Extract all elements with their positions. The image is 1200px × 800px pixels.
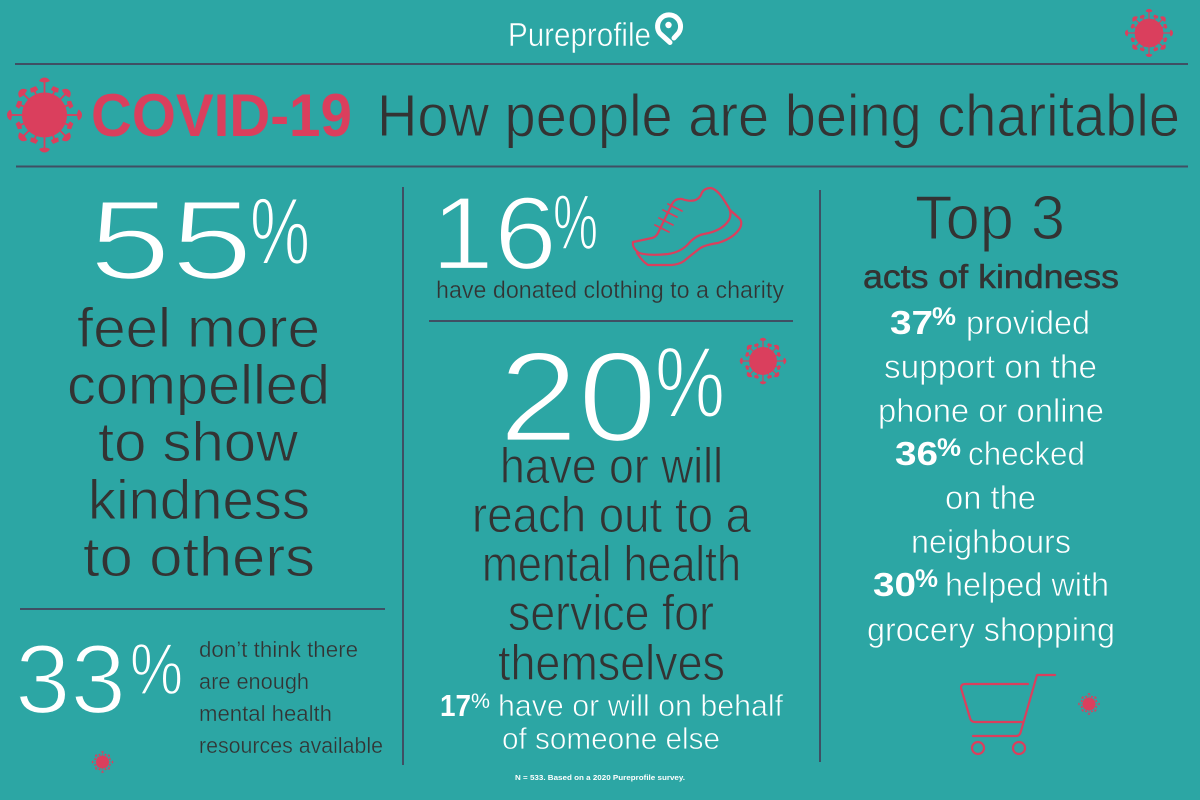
text: feel more compelled to show kindness to others — [67, 296, 330, 588]
panel: 55 percent — [67, 177, 330, 588]
text: mental health resources: are enough — [199, 669, 309, 694]
stat: 20% — [499, 326, 725, 469]
item: 36% checked on the neighbours: on the — [945, 479, 1036, 516]
stat: 55% — [89, 177, 310, 303]
item: 37% provided support: 37 — [890, 304, 933, 341]
icon: virus top right — [1125, 9, 1173, 57]
item: 37% provided support: % — [932, 303, 956, 331]
stat: 55%: % — [250, 179, 310, 285]
icon: virus small cart — [1078, 693, 1100, 715]
panel: 20 percent — [440, 326, 786, 756]
stat: 33%: 33 — [15, 624, 126, 734]
item: 36% checked on the neighbours — [895, 434, 1085, 560]
text: mental health resources: mental health — [199, 701, 332, 726]
text: have or will reach out to a mental health service for themselves: have or will — [500, 438, 723, 494]
item: 36% checked on the neighbours: 36 — [895, 435, 938, 472]
icon: shoe — [633, 188, 741, 265]
stat: 16% — [431, 176, 598, 292]
text: have or will reach out to a mental health service for themselves: mental health — [482, 536, 741, 592]
text: 17% on behalf of someone else: of someone else — [502, 721, 720, 756]
stat: 55%: 55 — [89, 177, 253, 303]
heading: Top 3: Top 3 — [915, 184, 1065, 253]
text: feel more compelled to show kindness to others: feel more — [77, 296, 320, 359]
text: have or will reach out to a mental health service for themselves: reach out to a — [472, 487, 751, 543]
text: feel more compelled to show kindness to others: to show — [98, 410, 299, 473]
text: have or will reach out to a mental health service for themselves — [472, 438, 751, 691]
icon: location pin — [658, 15, 681, 42]
text: 17% on behalf of someone else: 17 — [440, 688, 471, 723]
icon: virus medium — [740, 338, 786, 384]
text: feel more compelled to show kindness to others: compelled — [67, 353, 330, 416]
title: How people are being charitable: How people are being charitable — [377, 83, 1180, 149]
item: 37% provided support: phone or online — [878, 392, 1104, 429]
text: 17% on behalf of someone else: have or will on behalf — [498, 688, 783, 723]
footnote: N = 533. Based on a 2020 Pureprofile survey. — [515, 773, 685, 782]
icon: shopping cart — [961, 675, 1055, 754]
icon: virus large — [7, 78, 82, 152]
item: 30% helped with grocery shopping: % — [915, 565, 938, 593]
title: COVID-19: COVID-19 — [91, 82, 352, 149]
item: 30% helped with grocery shopping: helped with — [945, 566, 1109, 603]
stat: 16%: 16 — [431, 176, 557, 292]
text: feel more compelled to show kindness to others: kindness — [88, 468, 310, 531]
item: 36% checked on the neighbours: % — [937, 434, 961, 462]
text: 17% on behalf of someone else — [440, 688, 783, 756]
item: 37% provided support — [878, 303, 1104, 429]
stat: 33% — [15, 624, 183, 734]
stat: 20%: 20 — [499, 326, 657, 469]
heading: acts of kindness: acts of kindness — [863, 258, 1119, 295]
text: feel more compelled to show kindness to others: to others — [83, 525, 315, 588]
item: 30% helped with grocery shopping — [867, 565, 1115, 648]
item: 36% checked on the neighbours: neighbours — [911, 523, 1071, 560]
text: have or will reach out to a mental health service for themselves: service for — [508, 585, 714, 641]
panel: 16 percent — [431, 176, 784, 304]
panel: 33 percent — [15, 624, 383, 773]
item: 30% helped with grocery shopping: 30 — [873, 566, 916, 603]
text: have or will reach out to a mental health service for themselves: themselves — [498, 635, 725, 691]
item: 37% provided support: provided — [966, 304, 1090, 341]
text: mental health resources: resources available — [199, 733, 383, 758]
item: 37% provided support: support on the — [884, 348, 1097, 385]
text: mental health resources — [199, 637, 383, 758]
stat: 16%: % — [553, 178, 598, 266]
item: 36% checked on the neighbours: checked — [968, 435, 1085, 472]
stat: 20%: % — [655, 327, 725, 439]
item: 30% helped with grocery shopping: grocery shopping — [867, 611, 1115, 648]
title — [7, 78, 1180, 152]
panel: top 3 — [863, 184, 1119, 754]
text: have donated clothing to a charity: have donated clothing to a charity — [436, 277, 784, 304]
icon: virus small — [92, 751, 113, 773]
text: mental health resources: don’t think there — [199, 637, 358, 662]
logo: Pureprofile: Pureprofile — [508, 16, 651, 53]
stat: 33%: % — [130, 630, 183, 710]
text: 17% on behalf of someone else: % — [471, 690, 490, 713]
